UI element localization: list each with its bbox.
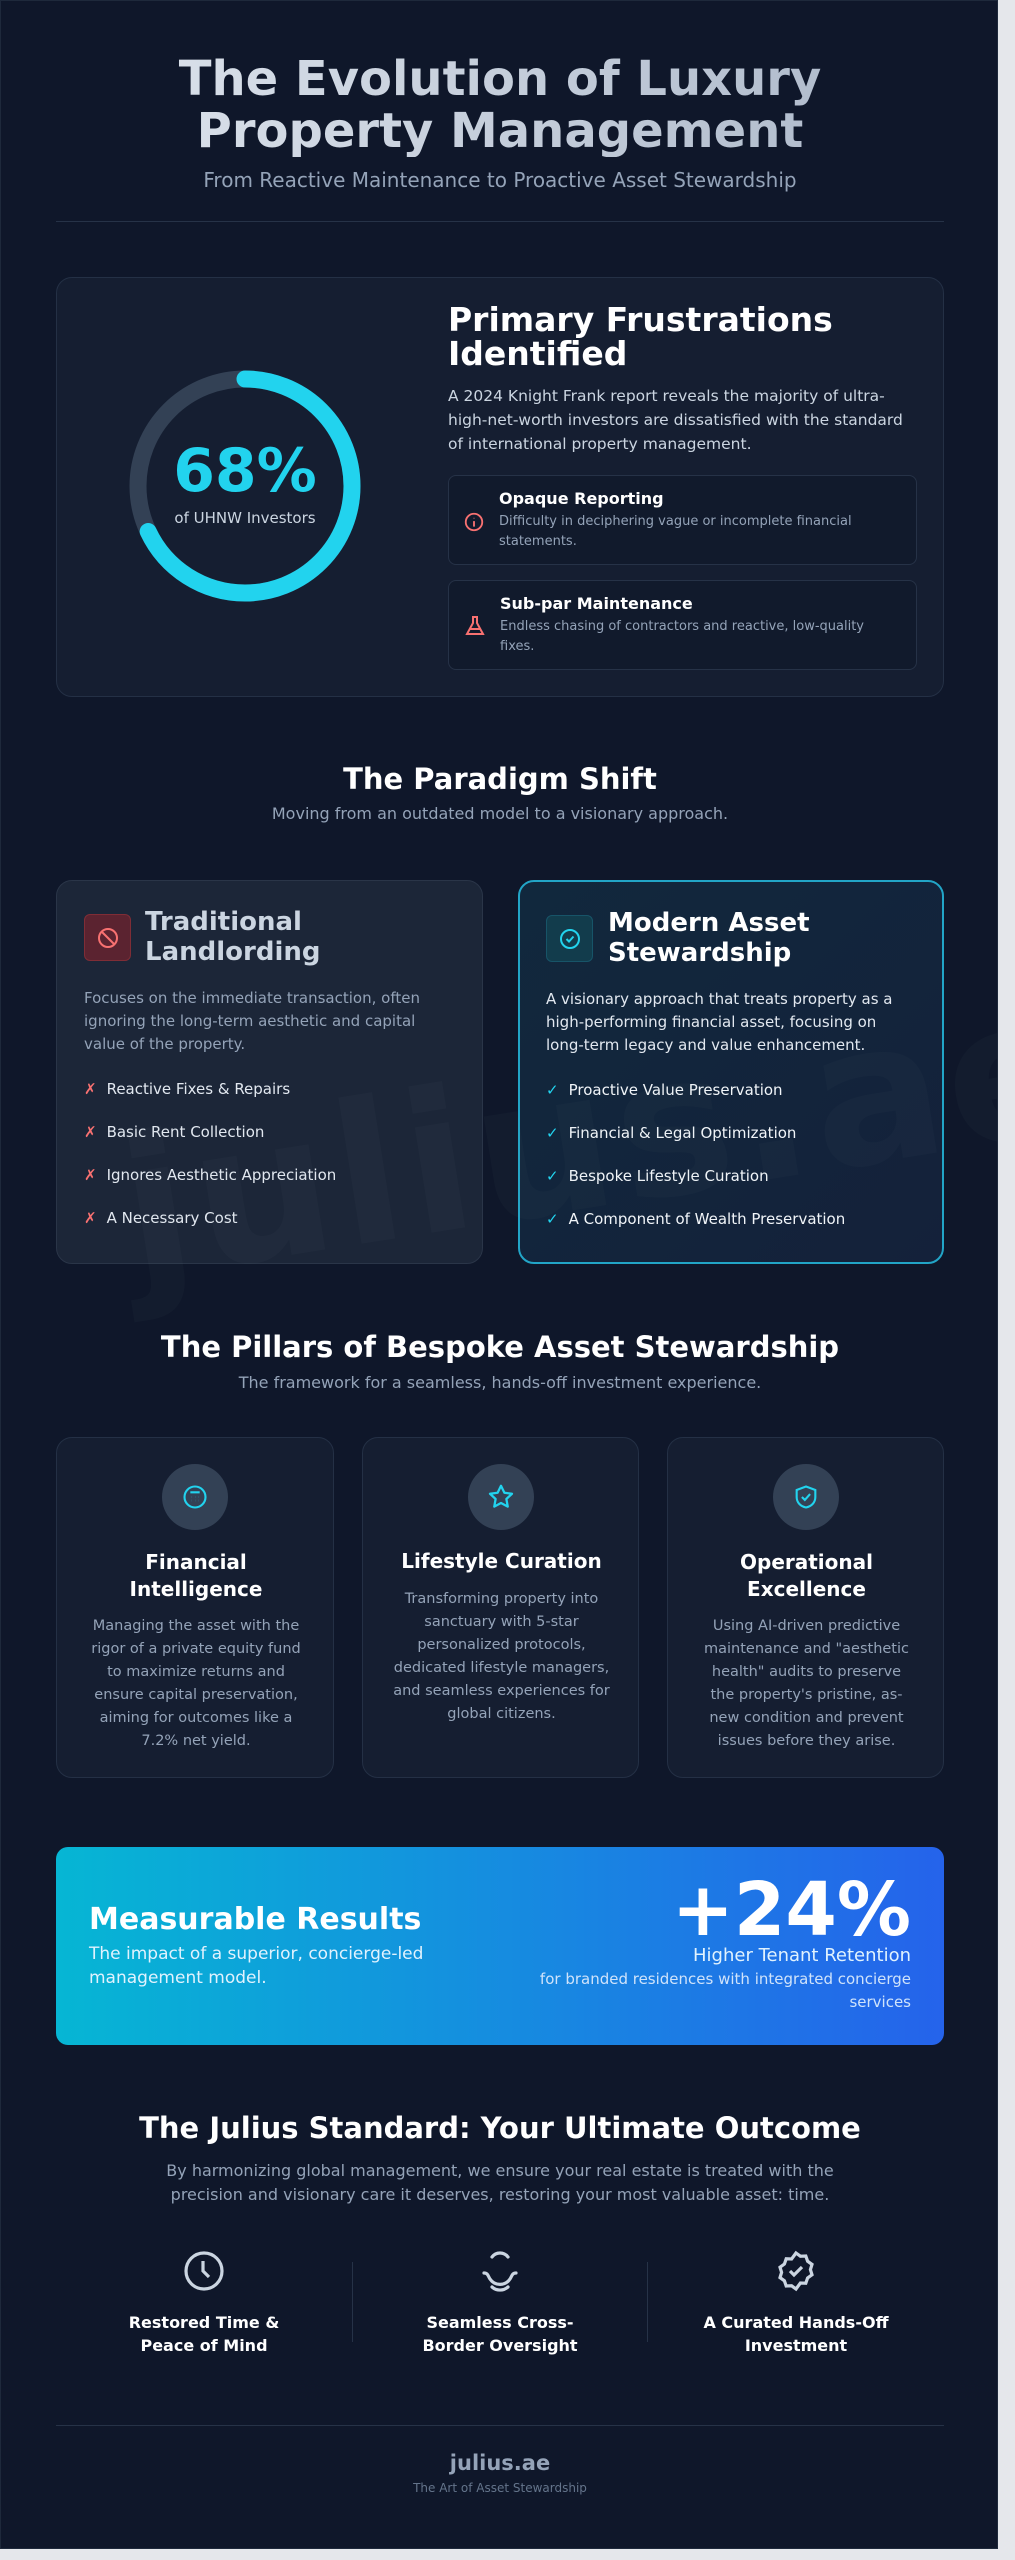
list: traditional: ✗ Ignores Aesthetic Appreciation — [84, 1166, 336, 1184]
list: traditional: ✗ Basic Rent Collection — [84, 1123, 264, 1141]
icon: prohibited — [84, 914, 131, 961]
panel: modern asset stewardship: A visionary approach that treats property as a high-performing financial asset, focusing on long-term legacy and value enhancement. — [546, 990, 892, 1054]
pillar: operational excellence: Excellence — [747, 1577, 866, 1601]
banner: measurable results — [56, 1847, 944, 2045]
box: opaque reporting — [448, 475, 917, 565]
list: modern: ✓ Financial & Legal Optimization — [546, 1124, 796, 1142]
list: traditional: ✗ Reactive Fixes & Repairs — [84, 1080, 290, 1098]
icon: check circle — [546, 915, 593, 962]
outcome: restored time: Restored Time & — [129, 2313, 279, 2332]
icon: star — [468, 1464, 534, 1530]
list: traditional — [84, 1080, 336, 1227]
box: opaque reporting: Difficulty in deciphering vague or incomplete financial statements. — [499, 514, 852, 549]
pillar: lifestyle curation: Transforming property into sanctuary with 5-star personalized protocols, dedicated lifestyle managers, and seamless experiences for global citizens. — [393, 1591, 610, 1722]
icon: info — [464, 512, 484, 532]
footer: julius.ae — [450, 2451, 550, 2475]
title: The Evolution of Luxury — [179, 51, 821, 107]
box: opaque reporting: Opaque Reporting — [499, 489, 664, 508]
heading: Primary Frustrations — [448, 300, 833, 339]
pillar: operational excellence — [667, 1437, 944, 1778]
text: By harmonizing global management, we ensure your real estate is treated with the precision and visionary care it deserves, restoring your most valuable asset: time. — [166, 2161, 834, 2204]
box: sub-par maintenance: Endless chasing of contractors and reactive, low-quality fixes. — [500, 619, 864, 654]
pillar: lifestyle curation — [362, 1437, 639, 1778]
panel: traditional landlording: Traditional — [145, 907, 302, 937]
panel: modern asset stewardship: Modern Asset — [608, 908, 810, 938]
heading: paradigm shift: The Paradigm Shift — [343, 762, 657, 796]
paragraph: A 2024 Knight Frank report reveals the majority of ultra-high-net-worth investors are dissatisfied with the standard of international property management. — [448, 387, 903, 453]
title: Property Management — [197, 103, 803, 159]
panel: primary frustrations — [56, 277, 944, 697]
footer: The Art of Asset Stewardship — [413, 2481, 587, 2495]
outcome: cross-border — [422, 2251, 578, 2355]
pillar: lifestyle curation: Lifestyle Curation — [401, 1549, 602, 1573]
outcomes row — [129, 2250, 889, 2355]
pillar: operational excellence: Operational — [740, 1550, 873, 1574]
icon: flask — [465, 616, 485, 635]
outcome: curated hands-off: Investment — [745, 2336, 847, 2355]
donut chart: of UHNW Investors — [174, 509, 316, 527]
donut chart — [130, 370, 360, 602]
list: modern — [546, 1081, 845, 1228]
text: The framework for a seamless, hands-off investment experience. — [239, 1373, 761, 1392]
outcome: cross-border: Border Oversight — [422, 2336, 578, 2355]
outcome: cross-border: Seamless Cross- — [426, 2313, 574, 2332]
footer — [413, 2451, 587, 2495]
panel: traditional landlording — [56, 880, 483, 1264]
box: sub-par maintenance — [448, 580, 917, 670]
panel: traditional landlording: Focuses on the immediate transaction, often ignoring the long-term aesthetic and capital value of the property. — [84, 989, 420, 1053]
text: Moving from an outdated model to a visionary approach. — [272, 804, 728, 823]
pillar: financial intelligence: Intelligence — [130, 1577, 262, 1601]
list: modern: ✓ Proactive Value Preservation — [546, 1081, 783, 1099]
heading — [448, 300, 833, 373]
stat: +24%: for branded residences with integrated concierge services — [540, 1970, 911, 2011]
pillar: financial intelligence: Financial — [145, 1550, 247, 1574]
icon: calculator — [162, 1464, 228, 1530]
pillar: financial intelligence — [56, 1437, 334, 1778]
box: sub-par maintenance: Sub-par Maintenance — [500, 594, 693, 613]
stat: +24%: +24% — [672, 1867, 911, 1953]
panel: traditional landlording: Landlording — [145, 937, 320, 967]
list: traditional: ✗ A Necessary Cost — [84, 1209, 238, 1227]
heading: pillars: The Pillars of Bespoke Asset Stewardship — [161, 1330, 839, 1364]
list: modern: ✓ Bespoke Lifestyle Curation — [546, 1167, 769, 1185]
panel: modern asset stewardship — [518, 880, 944, 1264]
subtitle: From Reactive Maintenance to Proactive Asset Stewardship — [203, 168, 797, 192]
heading: Identified — [448, 334, 627, 373]
outcome: restored time — [129, 2251, 279, 2355]
list: modern: ✓ A Component of Wealth Preservation — [546, 1210, 845, 1228]
outcome: restored time: Peace of Mind — [140, 2336, 268, 2355]
outcome: curated hands-off — [703, 2250, 889, 2355]
pillar: financial intelligence: Managing the asset with the rigor of a private equity fund to maximize returns and ensure capital preservation, aiming for outcomes like a 7.2% net yield. — [91, 1618, 301, 1749]
pillar: operational excellence: Using AI-driven predictive maintenance and "aesthetic health" audits to preserve the property's pristine, as-new condition and prevent issues before they arise. — [704, 1618, 909, 1749]
banner: measurable results: Measurable Results — [89, 1902, 421, 1937]
donut chart: 68% — [173, 436, 317, 506]
panel: modern asset stewardship: Stewardship — [608, 938, 791, 968]
heading: julius standard: The Julius Standard: Your Ultimate Outcome — [139, 2111, 861, 2145]
outcome: curated hands-off: A Curated Hands-Off — [703, 2313, 889, 2332]
banner: measurable results: The impact of a superior, concierge-led management model. — [89, 1944, 423, 1988]
title — [1, 53, 999, 157]
icon: shield — [773, 1464, 839, 1530]
stat: +24% — [540, 1867, 911, 2011]
stat: +24%: Higher Tenant Retention — [693, 1945, 911, 1966]
